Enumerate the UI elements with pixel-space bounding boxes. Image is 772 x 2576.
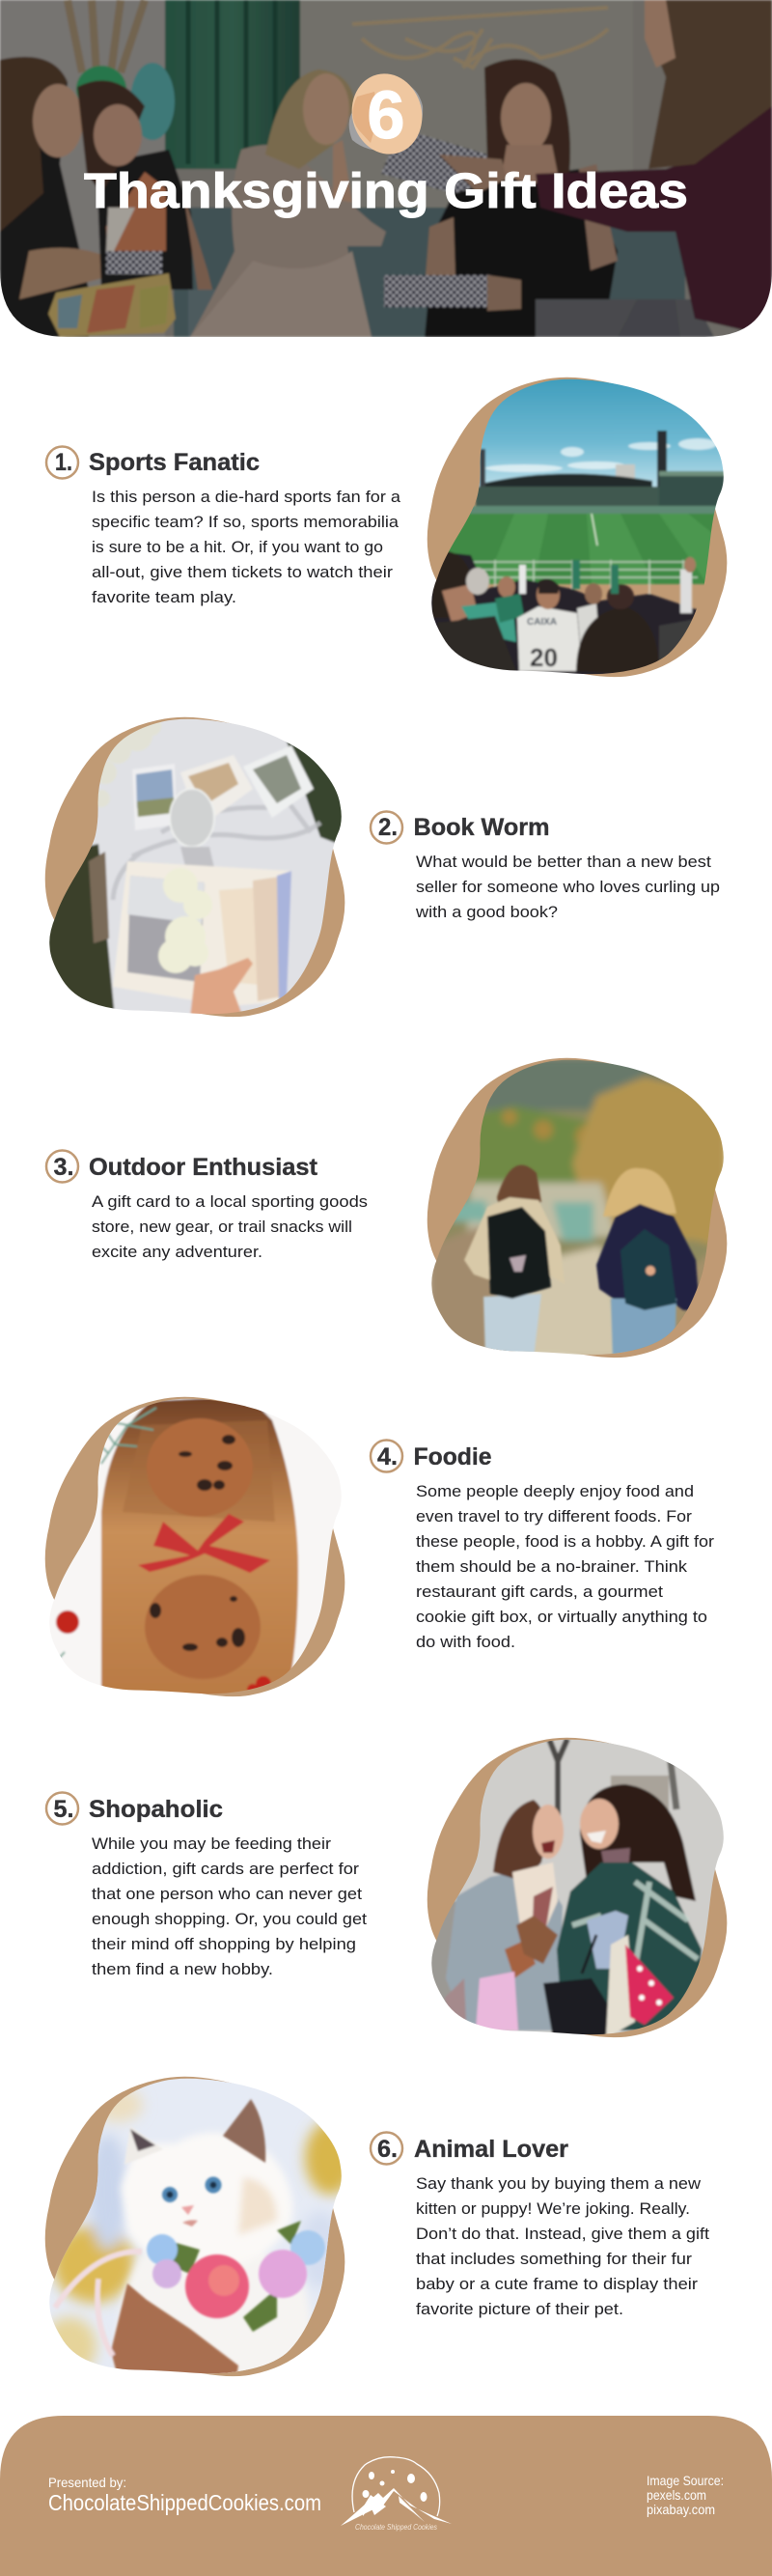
eyes [162,2187,178,2202]
body text 5: addiction, gift cards are perfect for [92,1861,360,1878]
left hiker [497,1165,541,1212]
body text 4: them should be a no-brainer. Think [416,1558,688,1576]
body and head fur [117,2254,311,2377]
image sources [647,2473,724,2517]
body text 5: enough shopping. Or, you could get [92,1911,367,1928]
presented by: ChocolateShippedCookies.com [48,2490,321,2515]
heading 4: Foodie [413,1443,492,1470]
body text 3: A gift card to a local sporting goods [92,1193,368,1211]
pine and berries [60,1406,158,1659]
photo: cookies on a board [45,1396,345,1697]
ribbon [55,2252,142,2356]
woman 3 [190,145,386,337]
body text 6: Don’t do that. Instead, give them a gift [416,2226,709,2243]
body text 4: these people, food is a hobby. A gift for [416,1533,715,1551]
body text 6: that includes something for their fur [416,2251,693,2268]
ribbon [138,1514,270,1573]
title: Thanksgiving Gift Ideas [84,163,688,218]
photo: book and flowers [45,716,345,1018]
body text 1: Is this person a die-hard sports fan for a [92,489,401,506]
body text 3: store, new gear, or trail snacks will [92,1218,352,1236]
body text 1: is sure to be a hit. Or, if you want to go [92,539,383,556]
number badge 2: 2. [378,814,398,841]
hand [111,2283,238,2377]
ears [124,2128,162,2164]
left woman [446,1867,563,2030]
number badge 4 [371,1441,402,1471]
photo: stadium: CAIXA [527,617,557,628]
gifts left [106,172,166,251]
image sources: Image Source: [647,2473,724,2488]
woman 4 [425,169,618,337]
item 3: Outdoor Enthusiast [46,1057,728,1358]
body text 3: excite any adventurer. [92,1244,262,1261]
body text 4: restaurant gift cards, a gourmet [416,1583,663,1601]
woman 2 [96,150,193,290]
body text 5: While you may be feeding their [92,1835,332,1853]
body text 2: seller for someone who loves curling up [416,879,720,896]
photo: two women shopping [427,1737,728,2038]
number badge 5 [46,1792,78,1825]
body text 6: kitten or puppy! We’re joking. Really. [416,2200,690,2218]
heading 5: Shopaholic [89,1796,223,1823]
photo: stadium [427,377,728,678]
body text 2 [415,854,720,921]
badge: number 6: 6 [368,77,404,153]
body text 2: What would be better than a new best [416,854,711,871]
body text 1: all-out, give them tickets to watch their [92,564,394,581]
logo: cookie and mountain: Chocolate Shipped Cookies [355,2523,437,2532]
flower collar [166,2221,301,2332]
number badge 3 [46,1151,78,1182]
top gift [381,128,487,193]
heading 1: Sports Fanatic [89,449,260,476]
body text 4: do with food. [416,1634,515,1651]
body text 4 [416,1483,715,1651]
polaroids [132,764,177,830]
badge: number 6 [344,67,430,161]
body text 1: specific team? If so, sports memorabilia [92,514,400,531]
body text 5: that one person who can never get [92,1886,362,1903]
image sources: pexels.com [647,2487,706,2503]
body text 6 [416,2175,709,2318]
presented by: Presented by: [48,2475,126,2490]
photo: kitten with flower collar [42,2076,355,2377]
book [113,861,291,1006]
number badge 5: 5. [54,1796,73,1823]
right hiker [603,1168,676,1217]
number badge 2 [371,811,402,844]
body text 6: Say thank you by buying them a new [416,2175,701,2193]
presented by [48,2475,321,2515]
body text 1 [92,489,401,606]
item 1: Sports Fanatic [46,377,728,678]
woman 1 [0,58,89,337]
logo: cookie and mountain [341,2457,452,2532]
body text 5 [92,1835,367,1978]
photo: stadium: 20 [530,643,558,672]
right woman [580,1784,696,1901]
heading 6: Animal Lover [414,2136,568,2163]
number badge 6: 6. [377,2136,398,2163]
item 4: Foodie [45,1396,715,1697]
body text 6: baby or a cute frame to display their [416,2276,699,2293]
body text 5: their mind off shopping by helping [92,1936,356,1953]
body text 5: them find a new hobby. [92,1961,273,1978]
item 5: Shopaholic [46,1737,728,2038]
number badge 3: 3. [54,1154,73,1181]
image sources: pixabay.com [647,2502,715,2517]
number badge 4: 4. [377,1443,398,1470]
item 6: Animal Lover [42,2076,709,2377]
heading 3: Outdoor Enthusiast [89,1154,318,1181]
cookies [147,1418,253,1517]
footer panel [0,2416,772,2576]
body text 4: Some people deeply enjoy food and [416,1483,694,1500]
sofa [174,208,685,337]
item 2: Book Worm [45,716,720,1018]
photo: hikers [427,1057,728,1358]
number badge 1 [46,446,78,479]
number badge 6 [371,2132,402,2165]
woman 5 [536,97,772,337]
body text 1: favorite team play. [92,589,236,606]
heading 2: Book Worm [413,814,550,841]
body text 4: even travel to try different foods. For [416,1508,693,1526]
body text 4: cookie gift box, or virtually anything to [416,1609,707,1626]
body text 2: with a good book? [415,904,558,921]
header photo banner [0,0,772,337]
body text 3 [92,1193,368,1261]
body text 6: favorite picture of their pet. [416,2301,623,2318]
number badge 1: 1. [55,449,72,476]
